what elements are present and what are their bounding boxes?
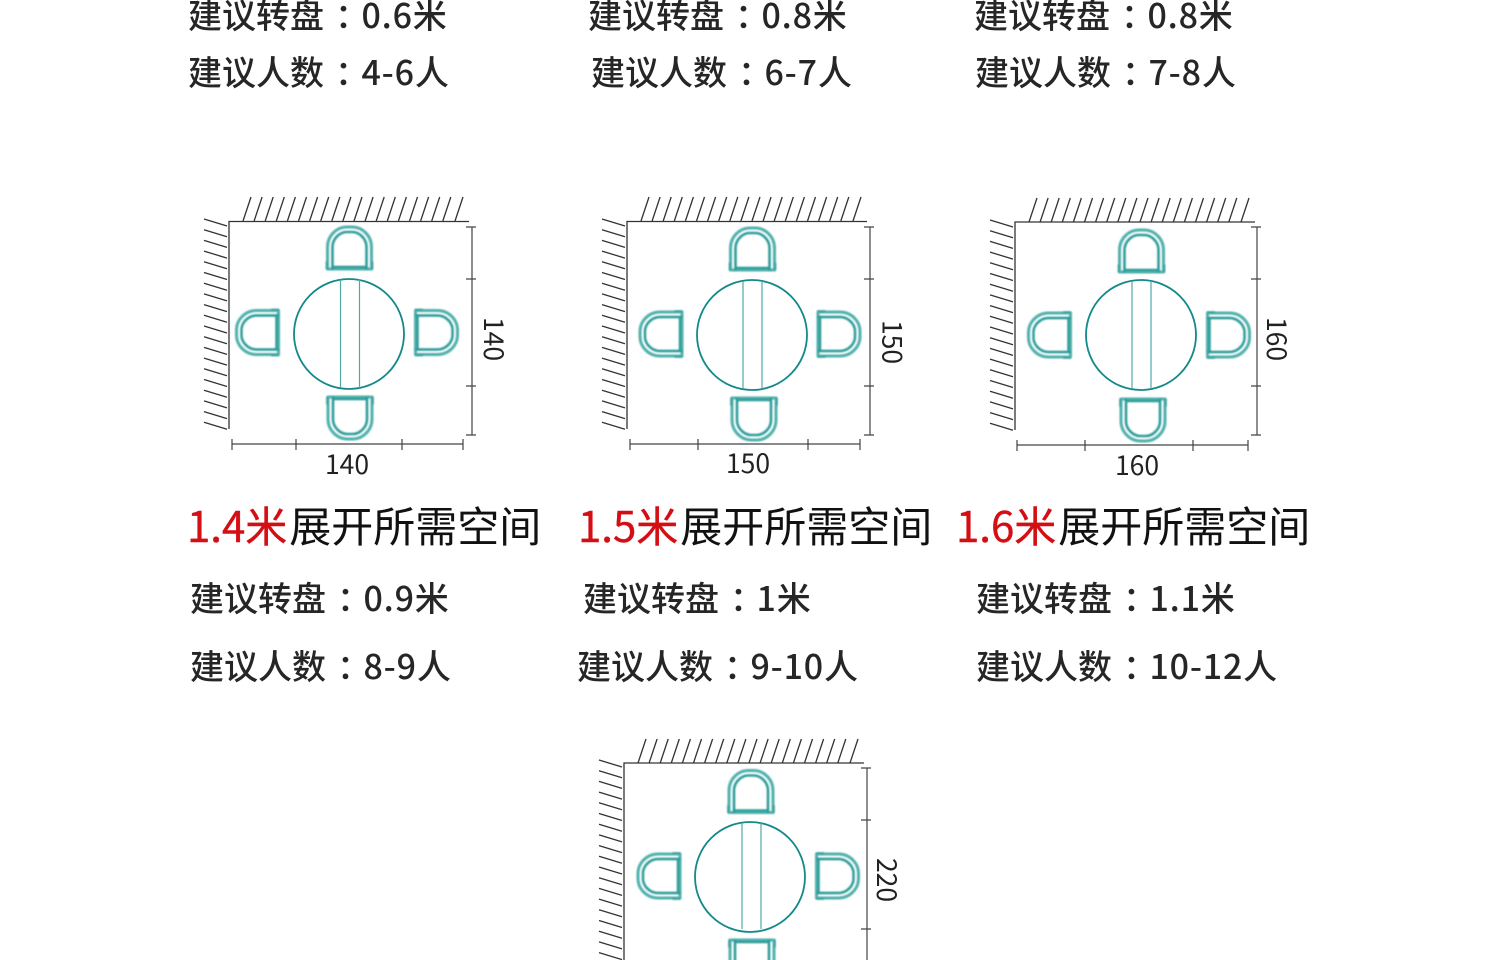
diagram: 1.6m layout xyxy=(990,198,1298,483)
title: 1.5m: 1.5米展开所需空间 xyxy=(578,494,932,555)
text: 1.4m specs: 建议人数 ：8-9人 xyxy=(190,640,451,689)
table with turntable xyxy=(695,822,805,932)
text: 1.6m specs xyxy=(976,572,1277,689)
text: 1.4m specs xyxy=(190,572,451,689)
text: 1.6m specs: 建议转盘 ：1.1米 xyxy=(976,572,1235,621)
dimension: bottom xyxy=(232,439,463,482)
text: 1.5m specs: 建议转盘 ：1米 xyxy=(583,572,811,621)
dimension: bottom xyxy=(630,439,860,481)
dimension: bottom: 140 xyxy=(325,443,369,482)
chairs xyxy=(236,227,458,439)
dimension: right xyxy=(466,227,515,435)
text: 1.4m specs: 建议转盘 ：0.9米 xyxy=(190,572,449,621)
dimension: right: 220 xyxy=(869,858,908,902)
dimension: right: 160 xyxy=(1259,317,1298,361)
title: 1.6m: 1.6米展开所需空间 xyxy=(956,494,1310,555)
diagram: 1.4m layout xyxy=(204,197,515,482)
dimension: right xyxy=(861,768,908,960)
dimension: right xyxy=(1251,227,1298,435)
title: 1.4m: 1.4米展开所需空间 xyxy=(187,494,541,555)
chairs xyxy=(1028,230,1250,441)
chairs xyxy=(638,770,858,960)
text: top middle specs: 建议人数 ：6-7人 xyxy=(591,46,852,95)
diagram: 2.2m layout (cropped) xyxy=(599,739,908,960)
diagram: 1.5m layout xyxy=(602,197,914,481)
chairs xyxy=(640,228,860,440)
dimension: bottom: 160 xyxy=(1115,444,1159,483)
table with turntable xyxy=(697,280,807,390)
dimension: right xyxy=(864,227,914,435)
text: top left specs xyxy=(188,0,449,95)
dimension: right: 140 xyxy=(476,317,515,361)
text: top middle specs xyxy=(588,0,852,95)
text: top left specs: 建议人数 ：4-6人 xyxy=(188,46,449,95)
dimension: bottom xyxy=(1017,440,1248,483)
dimension: bottom: 150 xyxy=(726,442,770,481)
text: 1.6m specs: 建议人数 ：10-12人 xyxy=(976,640,1277,689)
text: 1.5m specs: 建议人数 ：9-10人 xyxy=(577,640,858,689)
text: top right specs xyxy=(974,0,1236,95)
text: top right specs: 建议人数 ：7-8人 xyxy=(975,46,1236,95)
table with turntable xyxy=(1086,280,1196,390)
table with turntable xyxy=(294,279,404,389)
text: 1.5m specs xyxy=(577,572,858,689)
dimension: right: 150 xyxy=(874,320,914,364)
